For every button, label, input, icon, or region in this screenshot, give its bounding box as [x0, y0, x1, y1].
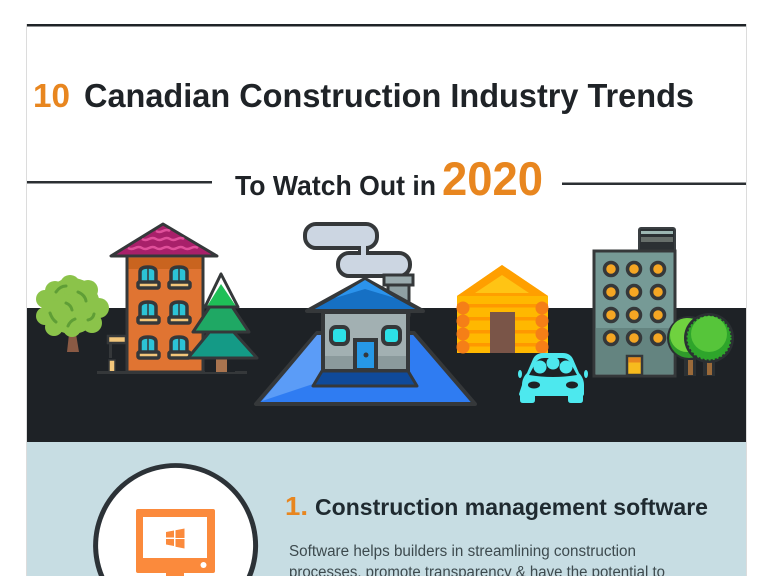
icon: pine tree [188, 274, 257, 372]
icon: monitor in circle [93, 463, 258, 576]
icon: log cabin [456, 265, 548, 354]
icon: office tower [594, 228, 675, 376]
chimney [384, 275, 413, 315]
icon: two bushy trees [667, 313, 734, 376]
title: Canadian Construction Industry Trends [84, 77, 694, 114]
smoke [305, 224, 410, 276]
walls [323, 312, 408, 370]
heading: trend 1: Construction management software [315, 494, 708, 520]
icon: round green tree [36, 275, 109, 352]
icon: house on blue platform [256, 224, 475, 404]
icon: orange apartment building [111, 224, 217, 372]
windows [138, 267, 190, 358]
subtitle: 2020 [442, 152, 543, 205]
door [355, 340, 376, 370]
subtitle [27, 152, 746, 205]
panel: dark street band [27, 308, 746, 442]
heading: trend 1: 1. [285, 491, 308, 521]
text block: trend 1 description [289, 543, 665, 576]
platform [256, 333, 475, 404]
title: 10 [33, 77, 70, 114]
icon: cyan car [518, 353, 588, 403]
porch [313, 371, 417, 386]
text block: trend 1 description: Software helps builders in streamlining construction [289, 543, 636, 560]
house windows [331, 327, 400, 344]
subtitle: To Watch Out in [235, 170, 436, 201]
icon: street sign [97, 336, 247, 374]
panel: trend 1 [27, 442, 746, 576]
roof [307, 279, 423, 311]
